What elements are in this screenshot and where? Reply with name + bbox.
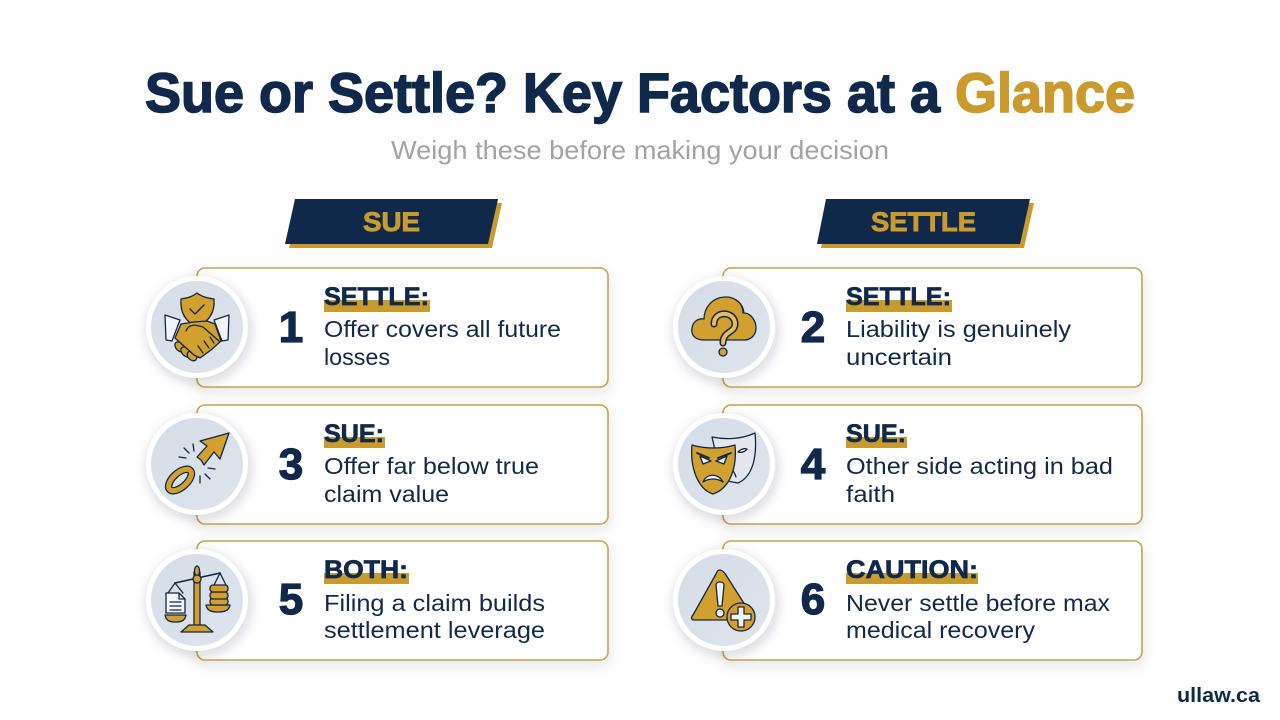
icon: shield and handshake [165, 293, 229, 363]
label: BOTH: BOTH: [324, 556, 408, 584]
label: SUE: SUE: [324, 420, 384, 448]
number 1: 1 [279, 303, 303, 352]
column header: SUE [285, 199, 502, 248]
text: factor 1: losses [324, 344, 390, 370]
column header: SUE: SUE [363, 207, 420, 237]
text: factor 4: Other side acting in bad [846, 453, 1113, 479]
label: CAUTION: CAUTION: [846, 556, 978, 584]
number 5: 5 [279, 575, 303, 624]
panel: factor 2 [676, 268, 1142, 387]
panel: factor 3 [148, 405, 608, 524]
text: factor 4 [846, 453, 1113, 507]
text: factor 2: Liability is genuinely [846, 316, 1071, 342]
text: factor 3: claim value [324, 481, 449, 507]
panel: factor 1 [148, 268, 608, 387]
text: factor 4: faith [846, 481, 895, 507]
column header: SETTLE [817, 199, 1034, 248]
icon: scales with document and coins [165, 566, 230, 632]
text: factor 2 [846, 316, 1071, 370]
text: factor 2: uncertain [846, 344, 952, 370]
text: factor 6: medical recovery [846, 617, 1035, 643]
text: factor 5: Filing a claim builds [324, 590, 545, 616]
text: factor 5: settlement leverage [324, 617, 545, 643]
brand: ullaw.ca: ullaw.ca [1177, 685, 1261, 707]
text: factor 6: Never settle before max [846, 590, 1110, 616]
number 3: 3 [279, 440, 303, 489]
number 4: 4 [801, 440, 826, 489]
icon: broken chain and rising arrow [165, 433, 229, 495]
text: factor 3: Offer far below true [324, 453, 539, 479]
icon: warning triangle with medical plus [692, 570, 755, 631]
column header: SETTLE: SETTLE [871, 207, 976, 237]
panel: factor 4 [676, 405, 1142, 524]
icon: theatre masks [692, 433, 756, 494]
text: factor 5 [324, 590, 545, 643]
text: factor 1 [324, 316, 561, 370]
text: factor 6 [846, 590, 1110, 643]
text: factor 1: Offer covers all future [324, 316, 561, 342]
number 2: 2 [801, 303, 825, 352]
label: SETTLE: SETTLE: [324, 283, 429, 311]
icon: cloud with question mark [692, 297, 756, 356]
panel: factor 6 [676, 541, 1142, 660]
number 6: 6 [801, 575, 825, 624]
label: SETTLE: SETTLE: [846, 283, 951, 311]
text: factor 3 [324, 453, 539, 507]
title: Sue or Settle? Key Factors at a Glance [145, 61, 1135, 124]
panel: factor 5 [148, 541, 608, 660]
subtitle: Weigh these before making your decision [391, 135, 889, 165]
label: SUE: SUE: [846, 420, 906, 448]
